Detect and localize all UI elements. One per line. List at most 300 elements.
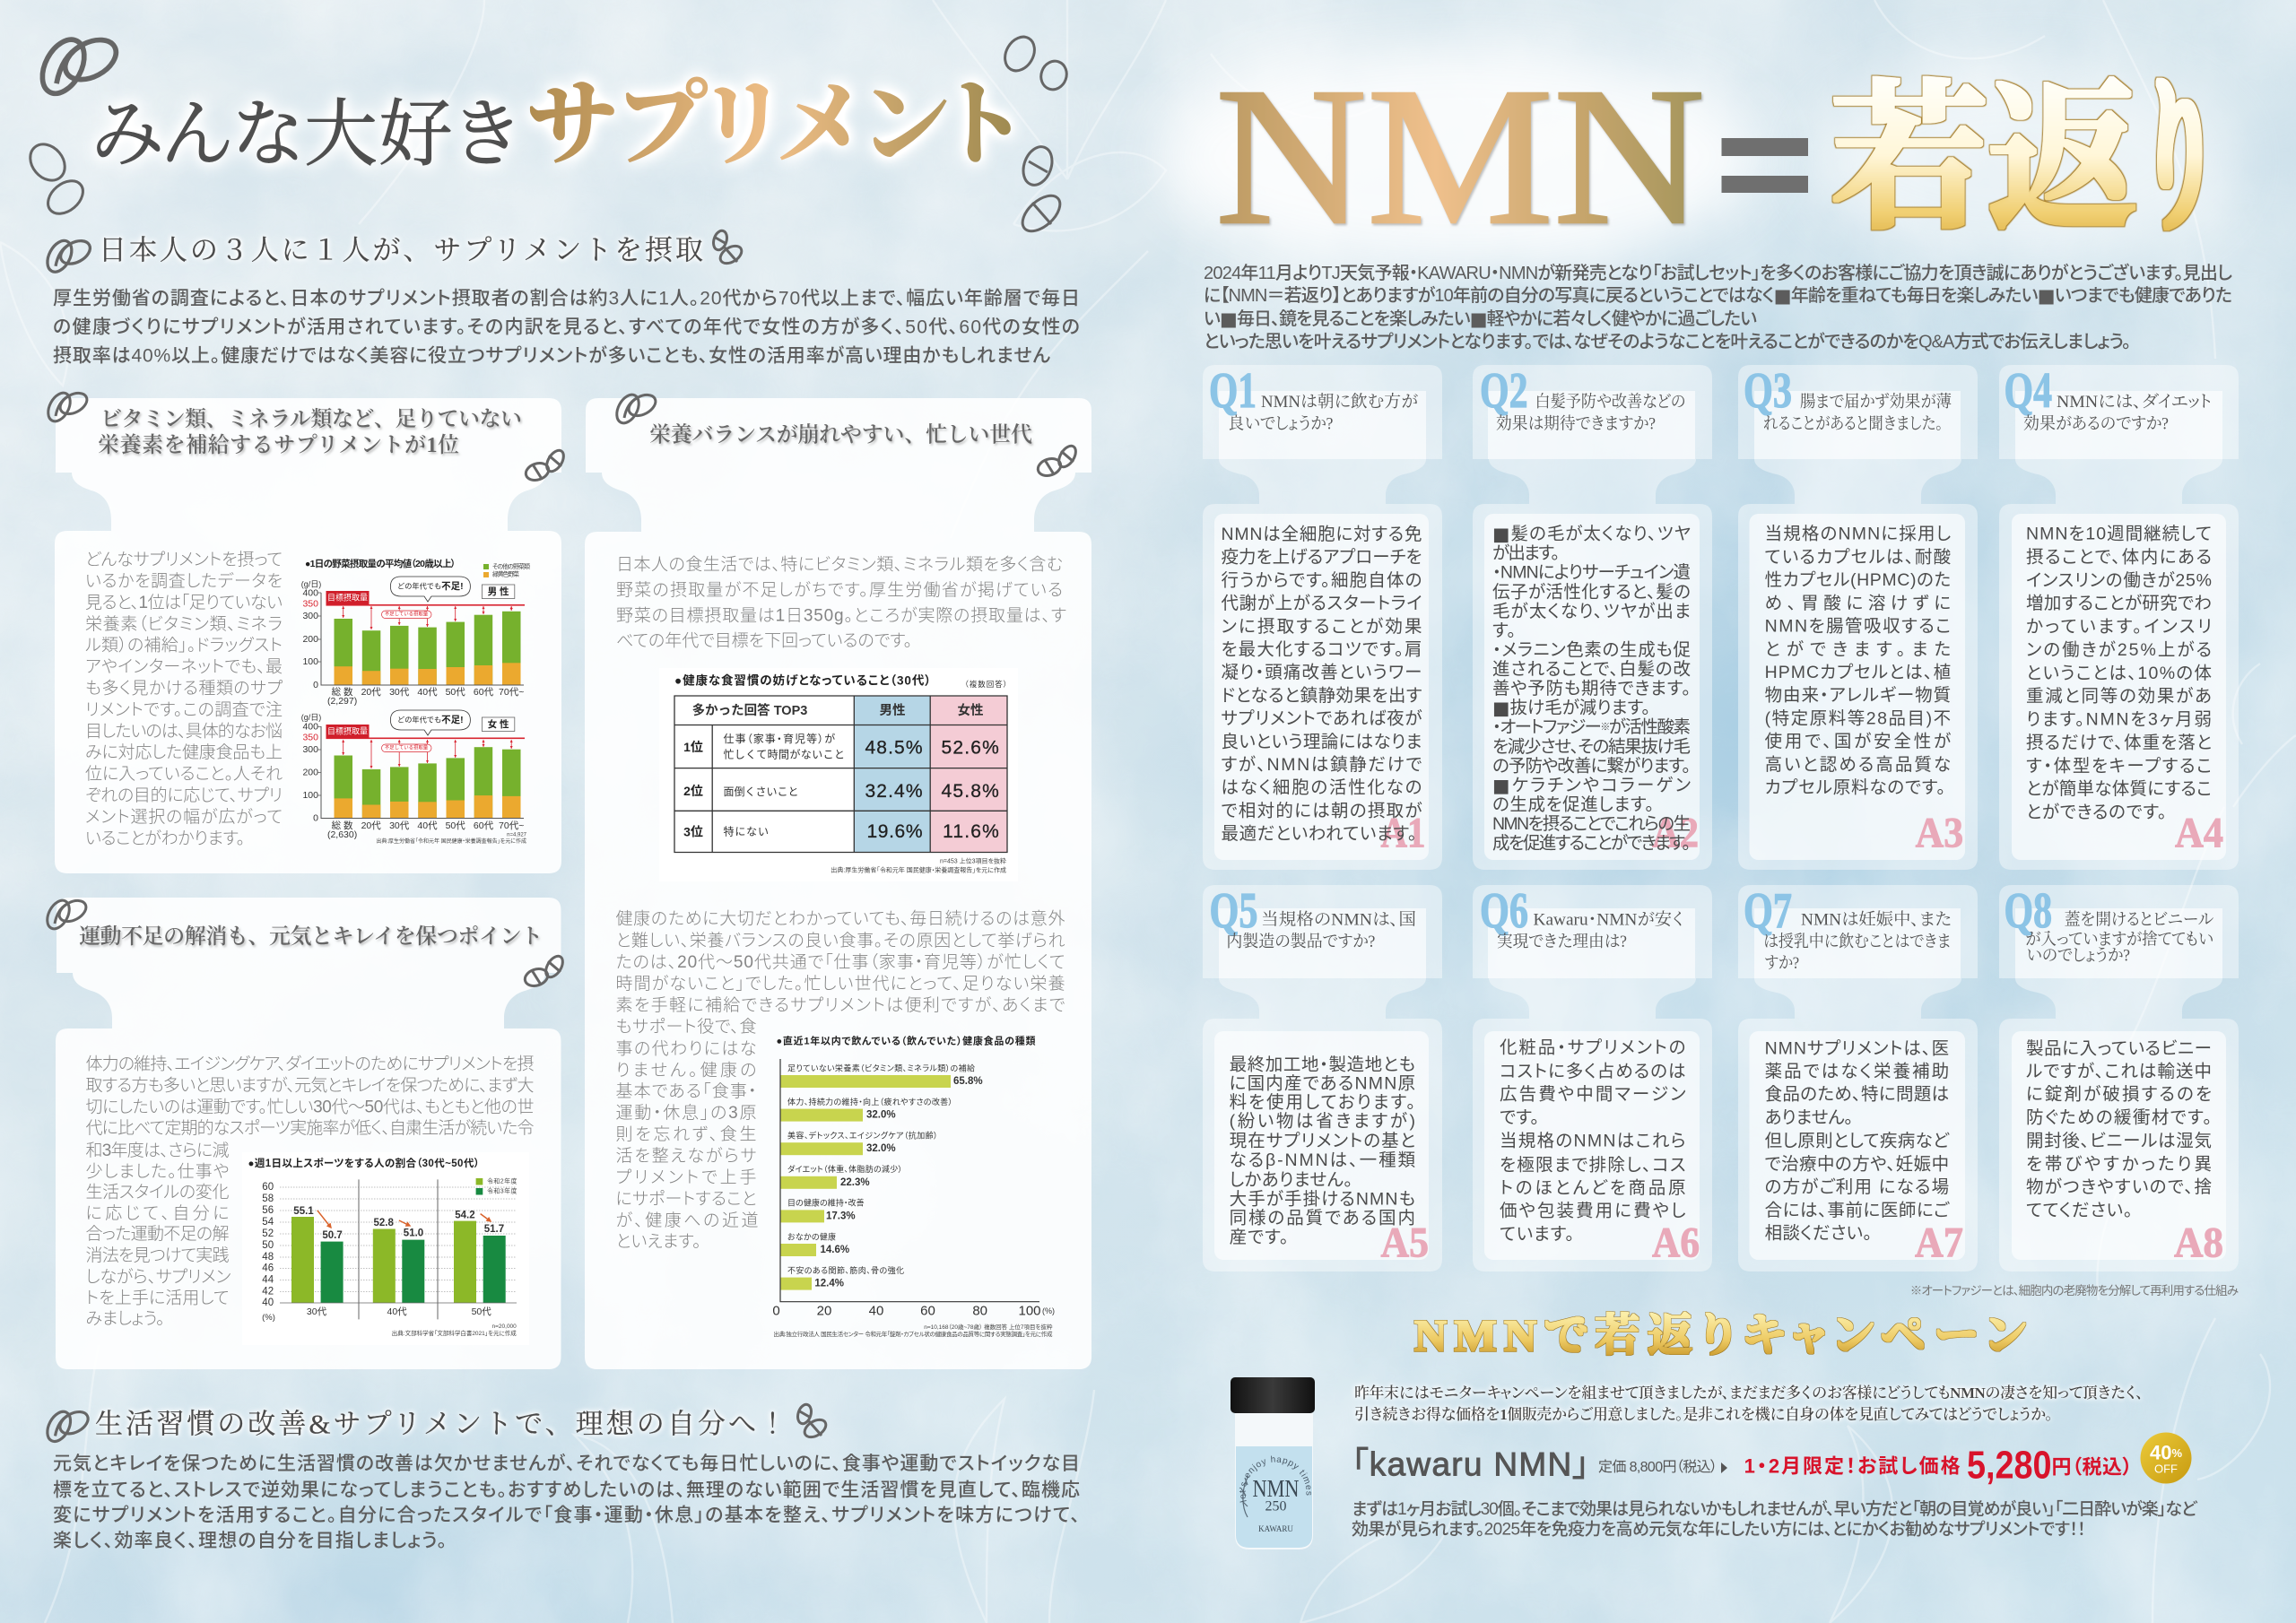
answer: しかありません。 xyxy=(1230,1170,1352,1190)
card: Q3 xyxy=(1738,363,1978,870)
text block: diet: べての年代で目標を下回っているのです。 xyxy=(616,631,912,651)
question: Kawaru・NMNが安く xyxy=(1534,910,1684,930)
answer: を極限まで排除し、コス xyxy=(1500,1155,1686,1175)
answer: の予防や改善に繋がります。 xyxy=(1492,756,1691,776)
chart: female: 200 xyxy=(302,768,318,778)
question xyxy=(1226,911,1416,951)
chart: female: 400 xyxy=(302,721,318,732)
chart: male: 200 xyxy=(302,634,318,645)
answer: NMNを摂ることでこれらの生 xyxy=(1492,814,1691,834)
chart: health food types: 32.0% xyxy=(866,1143,896,1154)
question: 内製造の製品ですか? xyxy=(1226,932,1375,951)
text block: exercise: に応じて、自分に xyxy=(86,1203,230,1223)
answer: カプセル原料なのです。 xyxy=(1765,778,1945,798)
title word: 若返り: 返 xyxy=(1987,71,2136,248)
text block: meals: と難しい、栄養バランスの良い食事。その原因として挙げられ xyxy=(615,931,1065,950)
chart: health food types: 0 xyxy=(772,1304,780,1318)
chart: female xyxy=(301,710,527,845)
answer xyxy=(2026,525,2212,822)
A2 label: A2 xyxy=(1652,809,1699,857)
text block: meals: にサポートすること xyxy=(615,1189,757,1209)
campaign closing text: まずは1ヶ月お試し30個。そこまで効果は見られないかもしれませんが、早い方だと「朝の目覚めが良い」「二日酔いが楽」など xyxy=(1352,1499,2198,1519)
icon: title pills xyxy=(23,31,1071,238)
price line xyxy=(1352,1444,2133,1487)
text block: diet: 野菜の摂取量が不足しがちです。厚生労働省が掲げている xyxy=(616,580,1063,600)
badge: 40% OFF: OFF xyxy=(2154,1462,2178,1476)
answer: 但し原則として疾病など xyxy=(1765,1132,1950,1151)
answer xyxy=(1221,525,1422,844)
answer: の方がご利用 になる場 xyxy=(1765,1177,1949,1197)
answer: なるβ-NMNは、一種類 xyxy=(1230,1150,1415,1170)
chart: female: n=4,927 xyxy=(507,832,527,838)
table: TOP3: 19.6% xyxy=(866,821,922,842)
table: TOP3: 32.4% xyxy=(865,781,922,802)
text block: diet: 日本人の食生活では、特にビタミン類、ミネラル類を多く含む xyxy=(616,554,1063,574)
chart: male: どの年代でも不足! xyxy=(397,581,464,592)
text block: も多く見かける種類のサプ xyxy=(85,678,283,698)
answer: 大手が手掛けるNMNも xyxy=(1230,1189,1415,1209)
text block: 見ると、1位は「足りていない xyxy=(85,593,283,612)
answer: コストに多く占めるのは xyxy=(1500,1062,1686,1081)
chart: male: 400 xyxy=(302,587,318,598)
chart: sports participation: 40 xyxy=(262,1298,274,1308)
A7 label: A7 xyxy=(1915,1219,1963,1266)
answer: ンの働きが25%上がる xyxy=(2026,640,2212,660)
answer: を最大化するコツです。肩 xyxy=(1222,640,1422,660)
chart: health food types: 不安のある関節、筋肉、骨の強化 xyxy=(787,1265,904,1275)
answer: かっています。インスリ xyxy=(2026,617,2212,637)
card: Q5 xyxy=(1203,883,1442,1271)
text block: どんなサプリメントを摂って xyxy=(85,550,283,569)
table: TOP3: 1位 xyxy=(683,740,703,754)
icon: NMN bottle: NMN xyxy=(1252,1475,1299,1502)
chart: male: 350 xyxy=(302,599,318,610)
chart: female: 40代 xyxy=(417,820,438,831)
campaign text: 引き続きお得な価格を1個販売からご用意しました。是非これを機に自身の体を見直してみてはどうでしょうか。 xyxy=(1354,1405,2053,1423)
chart: male: 100 xyxy=(302,656,318,667)
heading: 日本人の3人に1人が: 日本人の３人に１人が、サプリメントを摂取 xyxy=(99,235,703,265)
text block: NMN intro: といった思いを叶えるサプリメントとなります。では、なぜそのようなことを叶えることができるのかをQ&A方式でお伝えしましょう。 xyxy=(1204,332,2131,352)
text block: アやインターネットでも、最 xyxy=(85,658,283,677)
title: NMN=若返り xyxy=(1157,45,2233,269)
answer: NMNを腸管吸収するこ xyxy=(1765,617,1951,637)
answer: 当規格のNMNに採用し xyxy=(1765,525,1951,544)
question xyxy=(1497,910,1684,951)
chart: male: 0 xyxy=(313,680,318,690)
answer: ります。NMNを3ヶ月弱 xyxy=(2026,710,2212,730)
panel heading: ビタミン類、ミネラル類など、足りていない xyxy=(100,407,522,431)
answer xyxy=(1492,521,1691,854)
text block: closing: 変にサプリメントを活用すること。自分に合ったスタイルで「食事・運動・休息」の基本を整え、サプリメントを味方につけて、 xyxy=(53,1505,1080,1526)
question xyxy=(1763,911,1952,973)
Q7 label: Q7 xyxy=(1744,883,1792,939)
answer: NMNサプリメントは、医 xyxy=(1765,1038,1949,1058)
text block: meals: 時間がないこと」でした。忙しい世代にとって、足りない栄養 xyxy=(615,974,1065,994)
price line: 1・2月限定！お試し価格 xyxy=(1744,1454,1961,1478)
text block: exercise xyxy=(86,1055,535,1329)
question: 当規格のNMNは、国 xyxy=(1261,911,1416,930)
answer: 伝子が活性化すると、髪の xyxy=(1492,582,1691,602)
Q3 label: Q3 xyxy=(1744,363,1792,419)
chart: female: (2,630) xyxy=(327,829,357,840)
panel heading xyxy=(98,407,522,457)
chart: health food types: 出典:独立行政法人 国民生活センター 令和元年「錠剤・カプセル状の健康食品の品質等に関する実態調査」を元に作成 xyxy=(773,1330,1053,1338)
answer: 高いと認める高品質な xyxy=(1765,755,1951,775)
chart: health food types: 40 xyxy=(869,1304,883,1318)
A3 label: A3 xyxy=(1916,809,1963,857)
table: TOP3: （複数回答） xyxy=(965,680,1007,689)
heading: 生活習慣の改善: 生活習慣の改善&サプリメントで、理想の自分へ！ xyxy=(95,1408,787,1440)
answer: 化粧品・サプリメントの xyxy=(1500,1037,1686,1057)
chart: sports participation: (%) xyxy=(262,1313,275,1323)
text block: meals: が、健康への近道 xyxy=(615,1211,759,1230)
text block: meals: 運動・休息」の3原 xyxy=(615,1103,757,1123)
table: TOP3: n=453 上位3項目を抜粋 xyxy=(940,857,1006,864)
panel: exercise xyxy=(43,897,566,1369)
campaign closing text xyxy=(1352,1499,2198,1539)
text block: 目したいのは、具体的なお悩 xyxy=(85,721,283,741)
question: NMNは妊娠中、また xyxy=(1801,911,1952,930)
chart: sports participation: 50 xyxy=(262,1240,274,1251)
text block: intro: 摂取率は40%以上。健康だけではなく美容に役立つサプリメントが多いことも、女性の活用率が高い理由かもしれません xyxy=(53,346,1050,366)
question: 効果があるのですか? xyxy=(2023,414,2169,433)
text block: meals xyxy=(615,909,1065,1252)
question: すか? xyxy=(1765,955,1799,973)
A8 label: A8 xyxy=(2174,1219,2223,1266)
question: 実現できた理由は? xyxy=(1497,933,1627,951)
panel heading: 栄養バランスが崩れやすい、忙しい世代 xyxy=(649,423,1032,447)
answer: とができるのです。 xyxy=(2026,803,2167,822)
answer: トのほとんどを商品原 xyxy=(1500,1178,1686,1198)
card: Q1 xyxy=(1203,363,1442,870)
answer: を帯びやすかったり異 xyxy=(2026,1154,2212,1174)
text block: meals: といえます。 xyxy=(615,1232,701,1252)
answer: 使用で、国が安全性が xyxy=(1765,732,1951,751)
answer: 摂るだけで、体重を落と xyxy=(2026,733,2212,752)
chart: female: 不足している摂取量 xyxy=(385,743,429,751)
answer: 広告費や中間マージン xyxy=(1500,1085,1686,1105)
chart: female: 総 数 xyxy=(332,820,353,831)
text block: closing: 元気とキレイを保つために生活習慣の改善は欠かせませんが、それでなくても毎日忙しいのに、食事や運動でストイックな目 xyxy=(53,1454,1080,1474)
chart: sports participation: ●週1日以上スポーツをする人の割合（30代~50代） xyxy=(248,1157,479,1169)
chart: health food types: ダイエット（体重、体脂肪の減少） xyxy=(787,1164,902,1174)
question xyxy=(2023,393,2212,433)
chart: sports participation: n=20,000 xyxy=(492,1324,517,1330)
text block: meals: 事の代わりにはな xyxy=(615,1038,757,1058)
question: いのでしょうか? xyxy=(2026,947,2130,966)
badge: 40% OFF: 40% xyxy=(2150,1442,2182,1463)
text block: exercise: 和3年度は、さらに減 xyxy=(86,1141,230,1160)
answer: に錠剤が破損するのを xyxy=(2026,1085,2212,1105)
chart: sports participation: 30代 xyxy=(307,1306,327,1317)
heading: 日本人の3人に1人が xyxy=(42,229,744,276)
answer: NMNは全細胞に対する免 xyxy=(1222,525,1422,544)
answer: 製品に入っているビニー xyxy=(2026,1038,2212,1058)
chart: female: 女 性 xyxy=(488,718,509,730)
icon: pills xyxy=(613,391,1079,479)
chart: sports participation: 令和3年度 xyxy=(487,1186,517,1194)
chart: health food types: 80 xyxy=(972,1304,987,1318)
text block: meals: もサポート役で、食 xyxy=(615,1017,757,1037)
question: 腸まで届かず効果が薄 xyxy=(1800,393,1952,412)
question: が入っていますが捨ててもい xyxy=(2025,930,2213,949)
text block: closing: 楽しく、効率良く、理想の自分を目指しましょう。 xyxy=(53,1531,447,1551)
table: TOP3: 多かった回答 TOP3 xyxy=(692,702,807,718)
chart: male xyxy=(301,577,525,707)
answer: 合には、事前に医師にご xyxy=(1765,1201,1950,1220)
Q2 label: Q2 xyxy=(1480,363,1528,419)
text block: exercise: 合った運動不足の解 xyxy=(86,1224,230,1244)
chart: sports participation: 40代 xyxy=(387,1306,407,1317)
text block: 位に入っていること。人それ xyxy=(85,764,283,784)
text block: 栄養素（ビタミン類、ミネラ xyxy=(85,614,283,634)
icon: pills xyxy=(44,389,567,483)
price line: 定価 8,800円（税込） xyxy=(1598,1459,1718,1475)
chart: health food types: ●直近1年以内で飲んでいる（飲んでいた）健康食品の種類 xyxy=(777,1034,1035,1046)
answer: の生成を促進します。 xyxy=(1492,794,1654,814)
text block: exercise: 代に比べて定期的なスポーツ実施率が低く、自粛生活が続いた令 xyxy=(86,1118,535,1138)
answer: すが、NMNは鎮静だけで xyxy=(1221,755,1422,775)
answer: ■抜け毛が減ります。 xyxy=(1492,695,1650,721)
answer: 成を促進することができます。 xyxy=(1492,834,1691,854)
answer: はなく細胞の活性化なの xyxy=(1222,778,1422,798)
question xyxy=(2025,911,2214,966)
chart: male: (g/日) xyxy=(301,579,321,588)
chart: male: 目標摂取量 xyxy=(327,592,368,603)
table: TOP3: 男性 xyxy=(879,703,906,718)
price line: 円（税込） xyxy=(2052,1456,2133,1478)
answer: 進されることで、白髪の改 xyxy=(1492,660,1691,680)
answer: 重減と同等の効果があ xyxy=(2026,687,2212,707)
question xyxy=(1228,393,1418,433)
Q4 label: Q4 xyxy=(2004,363,2052,419)
chart: sports participation: 46 xyxy=(262,1263,274,1273)
text block: meals: りません。健康の xyxy=(615,1060,757,1080)
chart: female: 70代~ xyxy=(499,820,524,831)
card: Q4 xyxy=(1999,363,2239,870)
chart: female: 100 xyxy=(302,790,318,801)
chart: health food types: 32.0% xyxy=(866,1110,896,1121)
answer: 開封後、ビニールは湿気 xyxy=(2026,1132,2212,1151)
text block: exercise: トを上手に活用して xyxy=(86,1288,230,1307)
text block: NMN intro xyxy=(1204,262,2233,352)
question: れることがあると聞きました。 xyxy=(1763,414,1944,433)
panel: busy generation xyxy=(585,391,1091,1369)
chart: female: 20代 xyxy=(361,820,381,831)
chart: health food types: n=10,168（20歳~78歳） 複数回答 上位7項目を抜粋 xyxy=(924,1323,1053,1331)
question: NMNは朝に飲む方が xyxy=(1261,393,1418,412)
answer: ありません。 xyxy=(1765,1108,1853,1128)
table: TOP3: 48.5% xyxy=(865,737,922,759)
answer: 善や予防も期待できます。 xyxy=(1492,679,1691,699)
text block: meals: 素を手軽に補給できるサプリメントは便利ですが、あくまで xyxy=(615,995,1065,1015)
question: 蓋を開けるとビニール xyxy=(2065,911,2214,930)
answer: 相談ください。 xyxy=(1765,1224,1872,1244)
chart: health food types: おなかの健康 xyxy=(787,1231,836,1241)
answer xyxy=(1765,525,1952,798)
answer: 料を使用しております。 xyxy=(1230,1092,1415,1112)
question: 良いでしょうか? xyxy=(1228,413,1333,433)
answer: ているカプセルは、耐酸 xyxy=(1765,547,1952,567)
A4 label: A4 xyxy=(2175,809,2223,857)
table: TOP3 xyxy=(659,668,1018,881)
text block: exercise: 生活スタイルの変化 xyxy=(86,1183,230,1202)
chart: female: (g/日) xyxy=(301,713,321,722)
answer: 同様の品質である国内 xyxy=(1230,1208,1415,1228)
chart: female: 目標摂取量 xyxy=(327,726,368,735)
icon: NMN bottle: 250 xyxy=(1265,1499,1286,1514)
answer: 産です。 xyxy=(1230,1228,1289,1247)
chart: sports participation: 48 xyxy=(262,1252,274,1263)
chart: female: 300 xyxy=(302,744,318,755)
text block: みに対応した健康食品も上 xyxy=(85,742,283,762)
text block: いることがわかります。 xyxy=(85,829,245,848)
table: TOP3: 3位 xyxy=(683,825,703,839)
answer: ています。 xyxy=(1500,1225,1574,1245)
chart: health food types: 14.6% xyxy=(820,1245,849,1255)
text block: meals: 則を忘れず、食生 xyxy=(615,1124,757,1144)
icon: NMN bottle: let's enjoy happy times xyxy=(1239,1456,1311,1503)
campaign text: 昨年末にはモニターキャンペーンを組ませて頂きましたが、まだまだ多くのお客様にどうしてもNMNの凄さを知って頂きたく、 xyxy=(1354,1384,2144,1402)
chart: health food types: 22.3% xyxy=(840,1177,870,1188)
answer: (特定原料等28品目)不 xyxy=(1765,708,1951,728)
answer: ということは、10%の体 xyxy=(2026,664,2212,683)
answer xyxy=(2026,1038,2212,1220)
answer: ンに摂取することが効果 xyxy=(1222,617,1422,637)
campaign heading: NMNで若返りキャンペーン xyxy=(1414,1310,2026,1360)
question xyxy=(1496,393,1686,433)
chart: health food types: 60 xyxy=(920,1304,935,1318)
chart: health food types: (%) xyxy=(1042,1306,1055,1315)
answer: ・オートファジー※が活性酸素 xyxy=(1492,717,1691,737)
chart: health food types: 体力、持続力の維持・向上（疲れやすさの改善） xyxy=(787,1097,952,1107)
chart: female: 50代 xyxy=(446,820,465,831)
title: みんな大好きサプリメント xyxy=(91,74,1019,178)
text block xyxy=(85,550,283,848)
chart: health food types: 目の健康の維持・改善 xyxy=(787,1198,865,1208)
text block: NMN intro: 2024年11月よりTJ天気予報・KAWARU・NMNが新発売となり「お試しセット」を多くのお客様にご協力を頂き誠にありがとうございます。見出し xyxy=(1204,262,2233,283)
icon: NMN bottle xyxy=(1231,1377,1315,1549)
Q6 label: Q6 xyxy=(1480,883,1528,939)
chart: vegetable intake: ●1日の野菜摂取量の平均値（20歳以上） xyxy=(305,558,456,569)
answer xyxy=(1500,1037,1686,1245)
answer: (紛い物は省きますが) xyxy=(1230,1112,1415,1132)
chart: health food types: 17.3% xyxy=(826,1211,856,1221)
text block: exercise: 消法を見つけて実践 xyxy=(86,1245,230,1265)
answer: 防ぐための緩衝材です。 xyxy=(2026,1108,2212,1128)
badge: 40% OFF xyxy=(2140,1433,2192,1483)
title word: 若返り xyxy=(1831,71,2217,248)
chart: health food types xyxy=(772,1034,1055,1338)
Q5 label: Q5 xyxy=(1209,883,1257,939)
title word: NMN: NMN xyxy=(1215,47,1705,265)
chart: female: 出典:厚生労働省「令和元年 国民健康・栄養調査報告」を元に作成 xyxy=(376,838,526,845)
question: 効果は期待できますか? xyxy=(1496,414,1656,433)
answer: 当規格のNMNはこれら xyxy=(1500,1132,1686,1151)
answer: 摂ることで、体内にある xyxy=(2026,547,2212,567)
chart: sports participation: 50.7 xyxy=(322,1230,343,1241)
text block: meals: プリメントで上手 xyxy=(615,1167,757,1187)
table: TOP3: 仕事（家事・育児等）が xyxy=(723,732,835,745)
chart: female: 350 xyxy=(302,732,318,742)
campaign closing text: 効果が見られます。2025年を免疫力を高め元気な年にしたい方には、とにかくお勧めなサプリメントです！！ xyxy=(1352,1519,2086,1539)
chart: sports participation: 42 xyxy=(262,1286,274,1297)
answer: とが簡単な体質にするこ xyxy=(2026,779,2212,799)
text block: meals: たのは、20代〜50代共通で「仕事（家事・育児等）が忙しくて xyxy=(615,952,1065,972)
answer: 行うからです。細胞自体の xyxy=(1222,570,1422,590)
text block: ル類）の補給」。ドラッグスト xyxy=(85,636,283,655)
answer: ててください。 xyxy=(2026,1201,2133,1220)
answer: ドとなると鎮静効果を出す xyxy=(1222,686,1422,706)
text block: リメントです。この調査で注 xyxy=(85,699,283,719)
text block: exercise: 体力の維持、エイジングケア、ダイエットのためにサプリメントを摂 xyxy=(86,1055,535,1074)
chart: sports participation: 51.7 xyxy=(484,1224,504,1235)
answer: HPMCカプセルとは、植 xyxy=(1765,663,1951,682)
chart: sports participation: 56 xyxy=(262,1205,274,1216)
text block: diet xyxy=(616,554,1066,651)
answer: ・メラニン色素の生成も促 xyxy=(1492,640,1691,660)
answer: 代謝が上がるスタートライ xyxy=(1222,594,1422,613)
answer: を減少させ、その結果抜け毛 xyxy=(1492,737,1691,757)
chart: health food types: 美容、デトックス、エイジングケア（抗加齢） xyxy=(787,1130,938,1141)
answer: 疫力を上げるアプローチを xyxy=(1222,548,1422,568)
chart: sports participation: 44 xyxy=(262,1275,274,1286)
chart: vegetable intake: 緑黄色野菜 xyxy=(492,570,519,577)
title: みんな大好きサプリメント: みんな大好き xyxy=(91,93,518,176)
text block: meals: 健康のために大切だとわかっていても、毎日続けるのは意外 xyxy=(615,909,1065,929)
answer: 毛が太くなり、ツヤが出ま xyxy=(1492,602,1691,621)
chart: sports participation: 54 xyxy=(262,1217,274,1228)
chart: vegetable intake: その他の野菜類 xyxy=(492,562,530,570)
text block: exercise: 切にしたいのは運動です。忙しい30代〜50代は、もともと他の世 xyxy=(86,1098,535,1117)
chart: sports participation: 55.1 xyxy=(293,1206,314,1217)
card: Q7 xyxy=(1738,883,1978,1271)
text block: メント選択の幅が広がって xyxy=(85,807,283,827)
text block: NMN intro: い■毎日、鏡を見ることを楽しみたい■軽やかに若々しく健やかに過ごしたい xyxy=(1204,307,1757,332)
answer: す。 xyxy=(1492,621,1516,640)
question: は授乳中に飲むことはできま xyxy=(1763,933,1951,951)
answer: 価や包装費用に費やし xyxy=(1500,1202,1686,1221)
answer xyxy=(1765,1038,1950,1244)
table: TOP3: ●健康な食習慣の妨げとなっていること（30代） xyxy=(674,673,931,687)
text block: NMN intro: に【NMN＝若返り】とありますが10年前の自分の写真に戻るということではなく■年齢を重ねても毎日を楽しみたい■いつまでも健康でありた xyxy=(1204,283,2232,308)
table: TOP3: 45.8% xyxy=(942,781,999,802)
chart: male: (2,297) xyxy=(327,696,357,707)
text block: closing xyxy=(53,1454,1080,1551)
chart: health food types: 100 xyxy=(1018,1304,1041,1318)
chart: sports participation: 50代 xyxy=(472,1306,491,1317)
chart: male: 不足している摂取量 xyxy=(385,610,429,617)
title: NMN=若返り: り xyxy=(2140,71,2217,248)
chart: male: 60代 xyxy=(474,687,494,698)
text block: meals: 活を整えながらサ xyxy=(615,1146,757,1166)
chart: female: 60代 xyxy=(474,820,494,831)
chart: male: 40代 xyxy=(417,687,438,698)
answer: です。 xyxy=(1500,1108,1539,1128)
chart: male: 70代~ xyxy=(499,687,524,698)
chart: male: 300 xyxy=(302,611,318,621)
answer: め、胃酸に溶けずに xyxy=(1765,594,1951,613)
chart: male: 20代 xyxy=(361,687,381,698)
chart: sports participation: 60 xyxy=(262,1182,274,1193)
equals sign xyxy=(1722,138,1808,193)
title word: 若返り: 若 xyxy=(1831,71,1988,248)
table: TOP3: 面倒くさいこと xyxy=(723,785,798,798)
chart: female: どの年代でも不足! xyxy=(397,715,464,725)
chart: male: 50代 xyxy=(446,687,465,698)
card: Q2 xyxy=(1473,363,1712,870)
chart: vegetable intake xyxy=(301,558,530,845)
